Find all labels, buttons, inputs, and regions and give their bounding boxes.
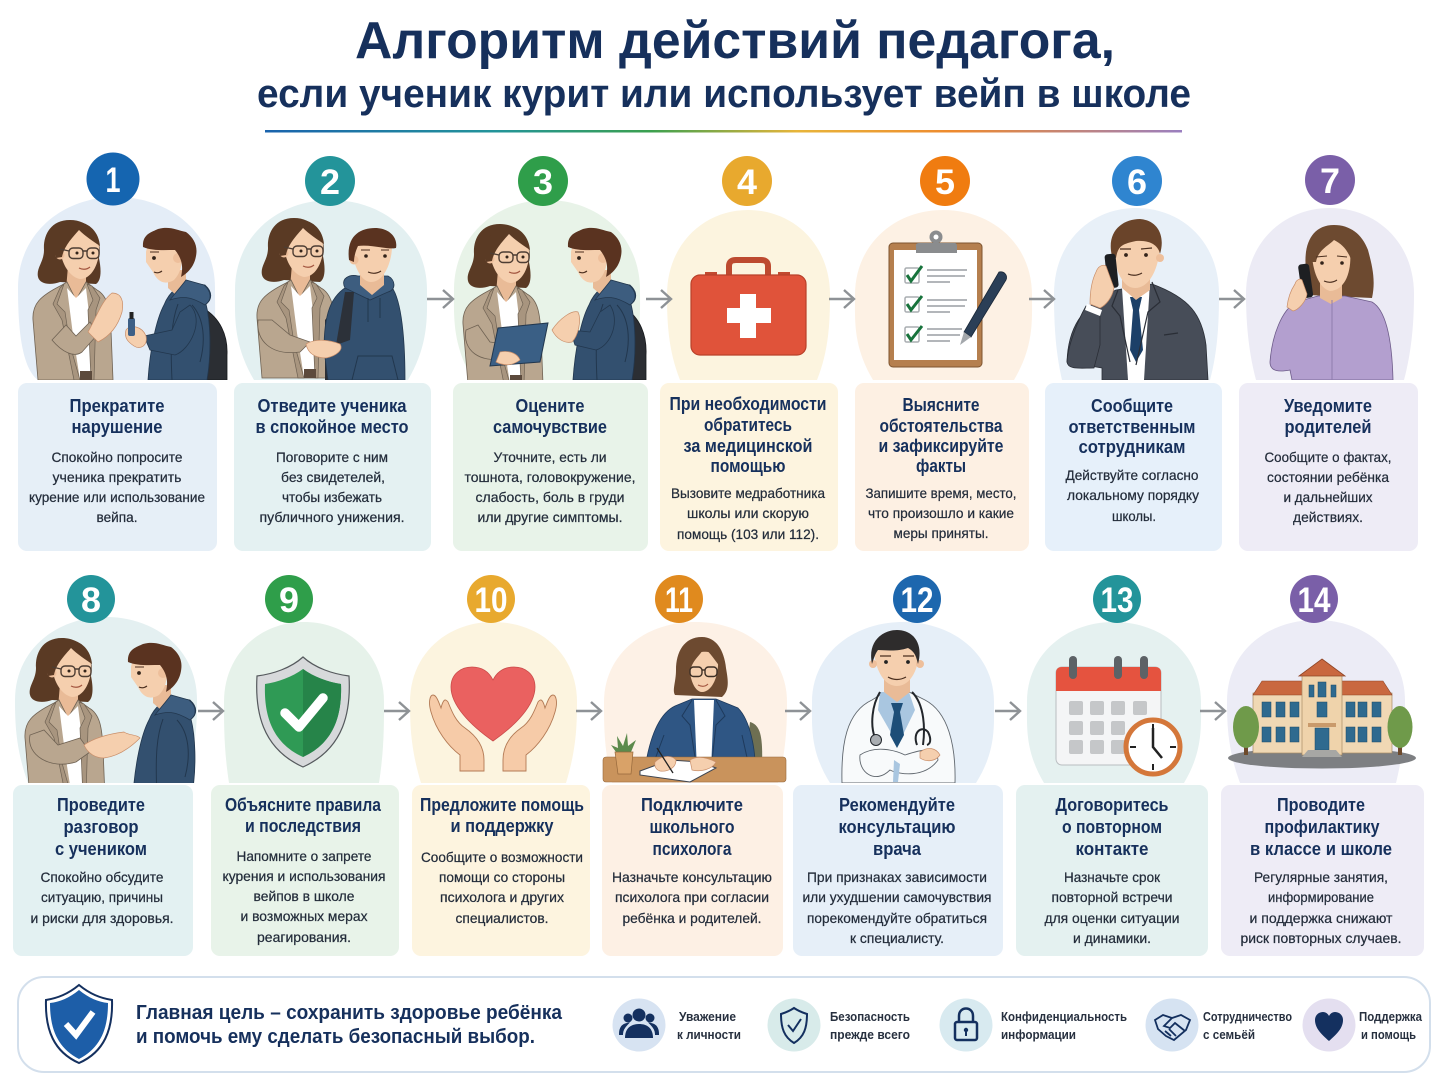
- card 4: Вызовите медработника: [671, 485, 825, 501]
- card 12: врача: [873, 839, 922, 859]
- value: safety: прежде всего: [830, 1028, 910, 1042]
- main goal text: [136, 1002, 563, 1048]
- card 12: или ухудшении самочувствия: [802, 889, 992, 905]
- step 5: [855, 156, 1032, 551]
- illustration: heart in hands: [410, 622, 577, 783]
- card 1: курение или использование: [29, 489, 205, 505]
- card 10: специалистов.: [456, 910, 548, 926]
- card 1: Спокойно попросите: [52, 449, 183, 465]
- card 4: обратитесь: [704, 415, 792, 435]
- title: Алгоритм действий педагога,: [355, 12, 1115, 70]
- card 10: и поддержку: [450, 816, 554, 836]
- card 6: ответственным: [1068, 417, 1196, 437]
- bottom panel: [18, 977, 1430, 1072]
- title: если ученик курит или использует вейп в школе: [257, 72, 1191, 116]
- card 10: Сообщите о возможности: [421, 849, 583, 865]
- card 3: Оцените: [516, 396, 584, 416]
- value: safety: [768, 998, 910, 1052]
- card 1: ученика прекратить: [52, 469, 182, 485]
- number badge 1: 1: [106, 161, 120, 200]
- card 9: и последствия: [245, 816, 361, 836]
- number badge 7: [1305, 155, 1355, 205]
- card 13: и динамики.: [1073, 930, 1151, 946]
- card 11: ребёнка и родителей.: [622, 910, 762, 926]
- card 14: профилактику: [1264, 817, 1380, 837]
- card 13: о повторном: [1062, 817, 1162, 837]
- card 8: с учеником: [55, 839, 147, 859]
- step 14: [1221, 575, 1424, 956]
- number badge 4: [722, 156, 772, 206]
- card 11: [602, 785, 783, 956]
- number badge 1: [86, 152, 140, 206]
- card 4: помощью: [710, 456, 786, 476]
- number badge 12: 12: [900, 581, 934, 620]
- card 8: и риски для здоровья.: [30, 910, 174, 926]
- title: [257, 12, 1191, 132]
- card 8: ситуацию, причины: [41, 889, 163, 905]
- step 4: [660, 156, 838, 551]
- step 8: [13, 575, 197, 956]
- card 13: для оценки ситуации: [1044, 910, 1180, 926]
- card 1: нарушение: [72, 417, 162, 437]
- card 6: [1045, 383, 1222, 551]
- card 7: Сообщите о фактах,: [1264, 449, 1392, 465]
- card 4: помощь (103 или 112).: [677, 526, 819, 542]
- number badge 5: [920, 156, 970, 206]
- card 10: психолога и других: [440, 889, 564, 905]
- illustration: teacher leads student aside: [235, 200, 427, 380]
- card 6: школы.: [1112, 508, 1156, 524]
- number badge 6: [1112, 156, 1162, 206]
- value: confidentiality: информации: [1001, 1028, 1076, 1042]
- card 13: [1016, 785, 1208, 956]
- card 5: [855, 383, 1029, 551]
- arrow 2 to 3: [427, 290, 453, 308]
- value: support: и помощь: [1361, 1028, 1416, 1042]
- card 11: Назначьте консультацию: [612, 869, 772, 885]
- card 9: [211, 785, 399, 956]
- card 3: самочувствие: [493, 417, 607, 437]
- card 5: факты: [916, 456, 966, 476]
- card 12: При признаках зависимости: [807, 869, 987, 885]
- card 9: вейпов в школе: [254, 888, 355, 904]
- illustration: parent on phone: [1246, 208, 1414, 380]
- arrow 10 to 11: [576, 702, 601, 720]
- step 11: [602, 575, 787, 956]
- number badge 10: 10: [474, 581, 508, 620]
- card 14: и поддержка снижают: [1250, 910, 1393, 926]
- card 2: Поговорите с ним: [276, 449, 388, 465]
- step 13: [1016, 575, 1208, 956]
- number badge 2: 2: [320, 163, 340, 202]
- arrow 12 to 13: [995, 702, 1020, 720]
- card 12: [793, 785, 1003, 956]
- card 6: Сообщите: [1091, 396, 1173, 416]
- number badge 7: 7: [1320, 162, 1340, 201]
- card 12: консультацию: [838, 817, 956, 837]
- card 4: за медицинской: [684, 436, 812, 456]
- main goal text: и помочь ему сделать безопасный выбор.: [136, 1026, 535, 1048]
- card 10: [412, 785, 590, 956]
- card 5: Выясните: [902, 395, 980, 415]
- number badge 5: 5: [935, 163, 955, 202]
- number badge 2: [305, 156, 355, 206]
- value: support: [1302, 998, 1423, 1052]
- step 10: [410, 575, 590, 956]
- card 5: обстоятельства: [880, 416, 1003, 436]
- card 3: слабость, боль в груди: [476, 489, 624, 505]
- icon: main goal shield: [46, 985, 112, 1063]
- card 2: [234, 383, 431, 551]
- card 7: [1239, 383, 1418, 551]
- value: respect: [612, 998, 741, 1052]
- card 14: [1221, 785, 1424, 956]
- card 13: Договоритесь: [1056, 795, 1168, 815]
- number badge 6: 6: [1127, 163, 1147, 202]
- number badge 9: [265, 575, 313, 623]
- card 1: Прекратите: [70, 396, 164, 416]
- illustration: psychologist at desk: [603, 622, 787, 783]
- arrow 6 to 7: [1219, 290, 1244, 308]
- value: respect: к личности: [677, 1028, 741, 1042]
- card 10: Предложите помощь: [420, 795, 584, 815]
- card 10: помощи со стороны: [439, 869, 565, 885]
- card 14: Регулярные занятия,: [1254, 869, 1388, 885]
- number badge 11: 11: [665, 581, 693, 620]
- step 12: [793, 575, 1003, 956]
- card 3: или другие симптомы.: [478, 509, 622, 525]
- number badge 8: [67, 575, 115, 623]
- card 11: Подключите: [641, 795, 743, 815]
- number badge 14: 14: [1298, 581, 1331, 620]
- value: safety: Безопасность: [830, 1010, 910, 1024]
- number badge 4: 4: [737, 163, 758, 202]
- card 11: психолога при согласии: [615, 889, 769, 905]
- value: support: Поддержка: [1359, 1010, 1423, 1024]
- card 13: контакте: [1076, 839, 1148, 859]
- card 8: Спокойно обсудите: [40, 869, 164, 885]
- card 5: меры приняты.: [894, 525, 988, 541]
- card 4: При необходимости: [670, 394, 826, 414]
- illustration: man on phone: [1054, 208, 1219, 380]
- card 11: психолога: [652, 839, 732, 859]
- card 12: Рекомендуйте: [839, 795, 955, 815]
- illustration: teacher talks with student: [15, 617, 197, 798]
- number badge 13: [1093, 575, 1141, 623]
- card 8: разговор: [64, 817, 139, 837]
- card 6: сотрудникам: [1078, 437, 1186, 457]
- value: cooperation: Сотрудничество: [1203, 1010, 1292, 1024]
- card 3: Уточните, есть ли: [494, 449, 606, 465]
- illustration: clipboard and pen: [855, 210, 1032, 380]
- card 3: тошнота, головокружение,: [464, 469, 636, 485]
- card 2: в спокойное место: [256, 417, 409, 437]
- card 5: Запишите время, место,: [866, 485, 1016, 501]
- card 11: школьного: [650, 817, 734, 837]
- card 9: реагирования.: [257, 929, 351, 945]
- number badge 3: [518, 156, 568, 206]
- illustration: school building: [1227, 620, 1416, 783]
- arrow 3 to 4: [646, 290, 671, 308]
- step 3: [453, 156, 648, 551]
- illustration: green shield: [224, 622, 384, 783]
- card 8: Проведите: [57, 795, 145, 815]
- card 7: действиях.: [1293, 509, 1363, 525]
- arrow 8 to 9: [198, 702, 223, 720]
- value: confidentiality: [940, 998, 1127, 1052]
- card 13: Назначьте срок: [1064, 869, 1161, 885]
- card 14: риск повторных случаев.: [1240, 930, 1402, 946]
- card 8: [13, 785, 193, 956]
- number badge 12: [893, 575, 941, 623]
- card 2: чтобы избежать: [282, 489, 382, 505]
- card 9: курения и использования: [222, 868, 386, 884]
- card 2: без свидетелей,: [281, 469, 385, 485]
- illustration: teacher checks wellbeing: [454, 200, 646, 384]
- card 9: Объясните правила: [225, 795, 382, 815]
- number badge 9: 9: [279, 581, 299, 620]
- card 12: к специалисту.: [850, 930, 944, 946]
- card 3: [453, 383, 648, 551]
- number badge 10: [467, 575, 515, 623]
- card 5: и зафиксируйте: [878, 436, 1004, 456]
- card 7: Уведомите: [1284, 396, 1372, 416]
- card 7: состоянии ребёнка: [1267, 469, 1389, 485]
- arrow 9 to 10: [384, 702, 409, 720]
- step 9: [211, 575, 399, 956]
- number badge 14: [1290, 575, 1338, 623]
- card 2: публичного унижения.: [260, 509, 404, 525]
- arrow 13 to 14: [1200, 702, 1225, 720]
- step 6: [1045, 156, 1222, 551]
- value: cooperation: с семьёй: [1203, 1028, 1255, 1042]
- card 14: в классе и школе: [1250, 839, 1392, 859]
- card 1: вейпа.: [96, 509, 138, 525]
- main goal text: Главная цель – сохранить здоровье ребёнка: [136, 1002, 563, 1024]
- value: respect: Уважение: [679, 1010, 736, 1024]
- card 1: [18, 383, 217, 551]
- card 7: родителей: [1284, 417, 1372, 437]
- card 6: локальному порядку: [1067, 487, 1199, 503]
- card 12: порекомендуйте обратиться: [807, 910, 987, 926]
- card 7: и дальнейших: [1284, 489, 1372, 505]
- value: cooperation: [1146, 998, 1292, 1052]
- card 14: Проводите: [1277, 795, 1365, 815]
- card 6: Действуйте согласно: [1066, 467, 1199, 483]
- arrow 4 to 5: [829, 290, 854, 308]
- number badge 3: 3: [533, 163, 553, 202]
- illustration: first aid kit: [667, 210, 830, 380]
- step 1: [18, 152, 227, 551]
- illustration: doctor: [812, 622, 994, 783]
- card 5: что произошло и какие: [868, 505, 1014, 521]
- step 2: [234, 156, 431, 551]
- value: confidentiality: Конфиденциальность: [1001, 1010, 1127, 1024]
- number badge 13: 13: [1100, 581, 1134, 620]
- arrow 5 to 6: [1029, 290, 1054, 308]
- step 7: [1239, 155, 1418, 551]
- card 4: школы или скорую: [687, 505, 809, 521]
- card 14: информирование: [1268, 889, 1374, 905]
- number badge 11: [655, 575, 703, 623]
- illustration: teacher stops student: [18, 197, 227, 380]
- number badge 8: 8: [81, 581, 101, 620]
- card 9: Напомните о запрете: [236, 848, 372, 864]
- illustration: calendar with clock: [1027, 622, 1201, 783]
- card 13: повторной встречи: [1052, 889, 1172, 905]
- card 2: Отведите ученика: [258, 396, 407, 416]
- card 4: [660, 383, 838, 551]
- arrow 11 to 12: [785, 702, 810, 720]
- card 9: и возможных мерах: [240, 908, 368, 924]
